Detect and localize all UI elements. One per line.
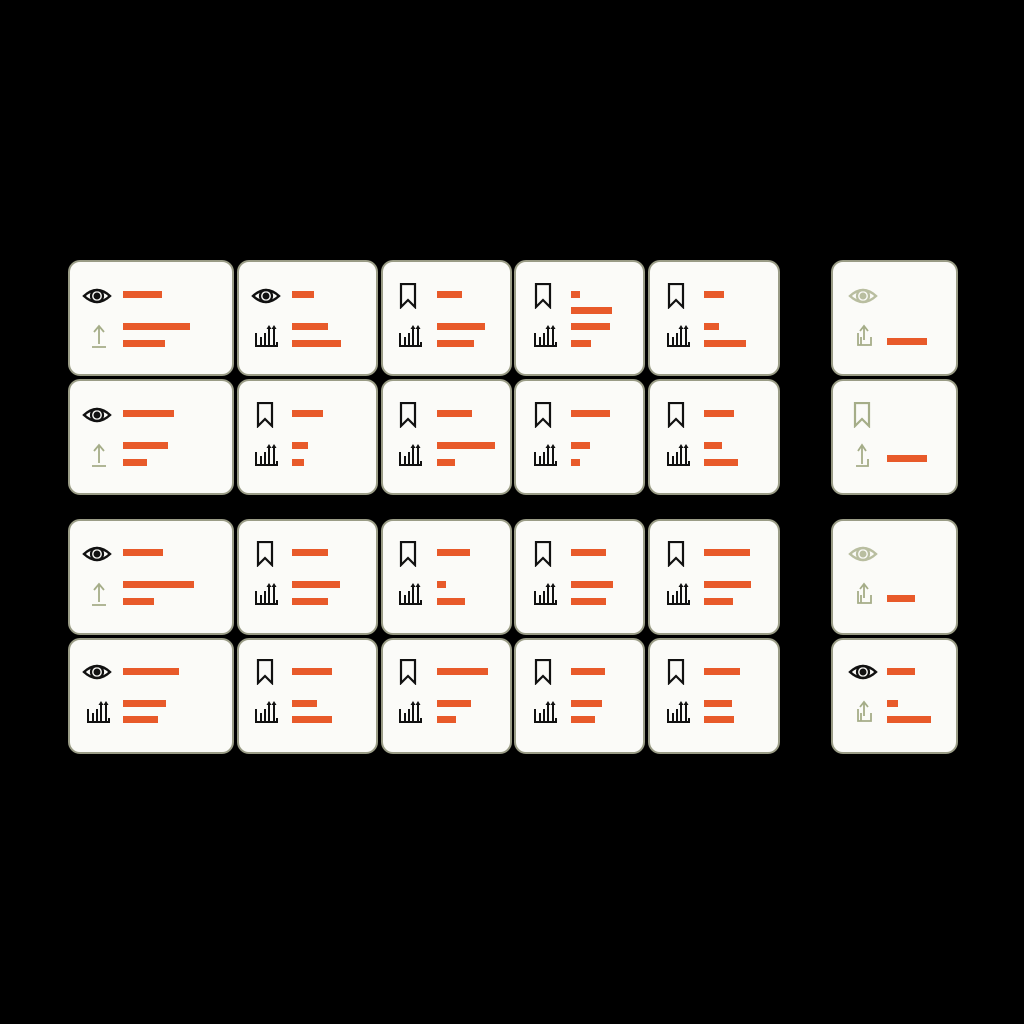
icon: arrow bbox=[856, 444, 869, 467]
icon: eye faded bbox=[848, 288, 878, 304]
bars bbox=[70, 639, 232, 641]
card: row1 col4 bbox=[514, 260, 645, 376]
icon: chart bbox=[252, 581, 282, 607]
icon: bookmark bbox=[668, 283, 684, 309]
card: row2 col2 bbox=[237, 379, 378, 495]
card: row2 col3 bbox=[381, 379, 512, 495]
icon: bookmark bbox=[529, 659, 559, 685]
bars bbox=[571, 291, 612, 347]
icon: eye faded bbox=[848, 541, 878, 567]
icon: upload bbox=[92, 324, 106, 348]
bars bbox=[887, 455, 927, 462]
icon: bookmark bbox=[400, 283, 416, 309]
icon: chart bbox=[396, 581, 426, 607]
card: row1 col1 bbox=[68, 260, 234, 376]
bars bbox=[383, 520, 510, 522]
icon: bookmark bbox=[529, 541, 559, 567]
card: row3 col3 bbox=[381, 519, 512, 635]
bars bbox=[704, 291, 746, 347]
card: row3 col1 bbox=[68, 519, 234, 635]
icon: eye bbox=[251, 288, 281, 304]
bars bbox=[437, 410, 495, 466]
card: row2 col1 bbox=[68, 379, 234, 495]
bars bbox=[516, 520, 643, 522]
icon: share bbox=[849, 581, 879, 607]
card: row4 col1 bbox=[68, 638, 234, 754]
icon: upload bbox=[92, 582, 106, 606]
bars bbox=[650, 639, 778, 641]
icon: bookmark bbox=[662, 659, 692, 685]
bars bbox=[833, 520, 956, 522]
icon: chart bbox=[531, 581, 561, 607]
icon: share bbox=[857, 324, 872, 346]
icon: bookmark bbox=[256, 402, 274, 428]
bars bbox=[292, 410, 323, 466]
icon: chart bbox=[255, 325, 278, 347]
icon: bookmark bbox=[534, 402, 552, 428]
icon: chart bbox=[664, 699, 694, 725]
bars bbox=[239, 639, 376, 641]
icon: bookmark bbox=[251, 659, 281, 685]
icon: bookmark bbox=[394, 541, 424, 567]
bars bbox=[123, 549, 194, 605]
icon: bookmark bbox=[394, 659, 424, 685]
icon: bookmark bbox=[668, 402, 684, 428]
icon: upload bbox=[92, 444, 106, 467]
bars bbox=[123, 410, 174, 466]
bars bbox=[437, 291, 485, 347]
card: row4 col4 bbox=[514, 638, 645, 754]
card: row3 col2 bbox=[237, 519, 378, 635]
bars bbox=[383, 639, 510, 641]
bars bbox=[650, 520, 778, 522]
icon: bookmark bbox=[662, 541, 692, 567]
icon: bookmark faded bbox=[854, 402, 870, 428]
card: row4 col6 bbox=[831, 638, 958, 754]
icon: chart bbox=[84, 699, 114, 725]
card: row4 col3 bbox=[381, 638, 512, 754]
icon: bookmark bbox=[256, 541, 274, 567]
card: row1 col5 bbox=[648, 260, 780, 376]
card: row4 col2 bbox=[237, 638, 378, 754]
icon: chart bbox=[667, 325, 690, 347]
icon: eye bbox=[82, 408, 112, 422]
icon: chart bbox=[531, 699, 561, 725]
icon: chart bbox=[667, 444, 690, 466]
card: row2 col5 bbox=[648, 379, 780, 495]
card: row1 col2 bbox=[237, 260, 378, 376]
bars bbox=[704, 410, 738, 466]
icon: chart bbox=[399, 444, 422, 466]
card: row3 col4 bbox=[514, 519, 645, 635]
bars bbox=[571, 410, 610, 466]
icon: bookmark bbox=[400, 402, 416, 428]
icon: eye bbox=[82, 546, 112, 562]
bars bbox=[516, 639, 643, 641]
card: row1 col3 bbox=[381, 260, 512, 376]
card: row2 col6 bbox=[831, 379, 958, 495]
card: row4 col5 bbox=[648, 638, 780, 754]
bars bbox=[887, 338, 927, 345]
card: row3 col6 bbox=[831, 519, 958, 635]
icon: eye bbox=[848, 659, 878, 685]
bars bbox=[123, 291, 190, 347]
card: row2 col4 bbox=[514, 379, 645, 495]
bars bbox=[833, 639, 956, 641]
icon: share bbox=[849, 699, 879, 725]
icon: chart bbox=[664, 581, 694, 607]
icon: eye bbox=[82, 288, 112, 304]
icon: eye bbox=[82, 659, 112, 685]
card: row3 col5 bbox=[648, 519, 780, 635]
icon: chart bbox=[396, 699, 426, 725]
icon: chart bbox=[399, 325, 422, 347]
icon: bookmark bbox=[534, 283, 552, 309]
icon: chart bbox=[252, 699, 282, 725]
icon: chart bbox=[255, 444, 278, 466]
bars bbox=[292, 291, 341, 347]
icon: chart bbox=[534, 325, 557, 347]
card: row1 col6 bbox=[831, 260, 958, 376]
bars bbox=[239, 520, 376, 522]
icon: chart bbox=[534, 444, 557, 466]
